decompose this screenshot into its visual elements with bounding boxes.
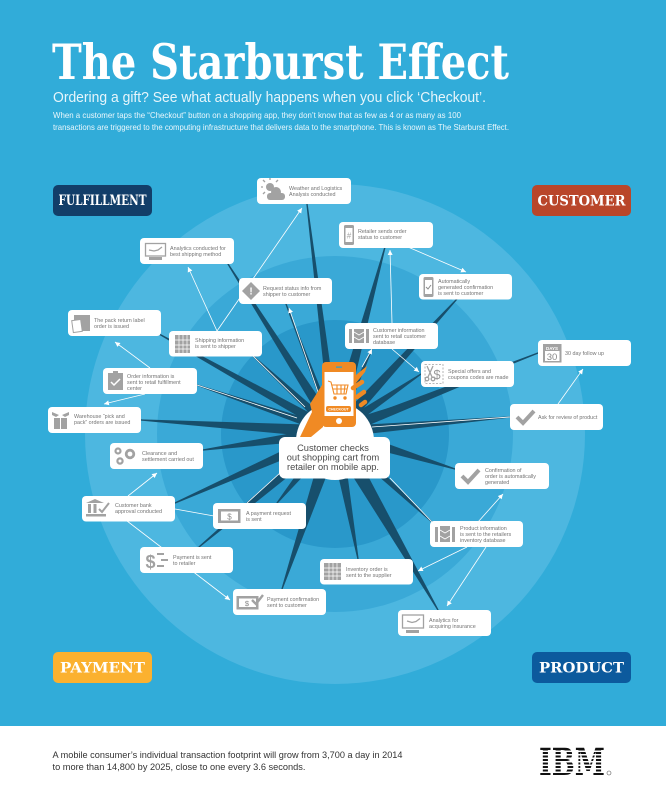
- IBM logo: IBM: [539, 740, 605, 784]
- card: payment sent to retailer: $: [145, 552, 156, 572]
- category tag: fulfillment: FULFILLMENT: [58, 193, 146, 209]
- title: The Starburst Effect: [52, 33, 509, 91]
- footer band: [0, 726, 666, 800]
- card: request status: shipper to customer: [263, 292, 311, 298]
- card: pack return label: [68, 310, 161, 336]
- icon: phone in hand: CHECKOUT: [328, 408, 349, 412]
- card: product information: [430, 521, 523, 547]
- card: customer information database: sent to retail customer: [373, 334, 426, 340]
- intro text: transactions are triggered to the computing infrastructure that delivers data to the smartphone. This is known as The Starburst Effect.: [53, 122, 509, 132]
- card: 30 day follow up: 30 day follow up: [565, 351, 604, 357]
- concentric rings: [85, 184, 585, 684]
- card: product information: Product information: [460, 526, 507, 532]
- card: analytics for insurance: Analytics for: [429, 618, 459, 624]
- card: confirmation of order: generated: [485, 480, 509, 486]
- card: ask for review: Ask for review of product: [538, 415, 598, 421]
- card: customer bank approval: [82, 496, 175, 522]
- card: payment request: [213, 503, 306, 529]
- card: automatically generated confirmation: generated confirmation: [438, 285, 493, 291]
- card: request status: [239, 278, 332, 304]
- card: pack return label: order is issued: [94, 324, 129, 330]
- card: payment request: is sent: [246, 517, 262, 523]
- card: clearance and settlement: settlement carried out: [142, 457, 194, 463]
- card: customer information database: database: [373, 340, 395, 346]
- subtitle: Ordering a gift? See what actually happens when you click ‘Checkout’.: [53, 90, 486, 106]
- card: 30 day follow up: DAYS: [546, 346, 558, 351]
- card: special offers and coupon codes: $: [433, 367, 441, 382]
- category tag: customer: CUSTOMER: [538, 194, 626, 210]
- intro text: When a customer taps the “Checkout” button on a shopping app, they don’t know that as few as 4 or as many as 100: [53, 110, 461, 120]
- card: special offers and coupon codes: Special offers and: [448, 369, 491, 375]
- card: payment sent to retailer: [140, 547, 233, 573]
- card: analytics for shipping: best shipping method: [170, 252, 221, 258]
- card: analytics for shipping: Analytics conducted for: [170, 246, 226, 252]
- center card: customer checks out: [279, 437, 390, 478]
- card: automatically generated confirmation: Automatically: [438, 279, 470, 285]
- card: confirmation of order: [455, 463, 549, 489]
- card: confirmation of order: order is automatically: [485, 474, 536, 480]
- intro text: [53, 110, 509, 132]
- card: weather and logistics: Analysis conducted: [289, 192, 335, 198]
- card: special offers and coupon codes: [421, 361, 514, 387]
- card: customer bank approval: approval conducted: [115, 509, 162, 515]
- card: confirmation of order: Confirmation of: [485, 468, 522, 474]
- card: retailer sends order status: #: [347, 232, 352, 240]
- card: customer information database: Customer information: [373, 328, 425, 334]
- category tag: product: [532, 652, 631, 683]
- card: retailer sends order status: status to customer: [358, 235, 402, 241]
- card: shipping information: Shipping information: [195, 338, 244, 344]
- card: retailer sends order status: Retailer sends order: [358, 229, 407, 235]
- card: pack return label: The pack return label: [94, 318, 145, 324]
- card: request status: !: [249, 286, 253, 298]
- card: payment confirmation: Payment confirmation: [267, 597, 319, 603]
- card: order information: sent to retail fulfillment: [127, 380, 181, 386]
- card: automatically generated confirmation: [419, 274, 512, 300]
- card: weather and logistics: [257, 178, 351, 204]
- white connector arrows: [104, 208, 583, 606]
- card: 30 day follow up: 30: [547, 352, 557, 363]
- card: inventory order: Inventory order is: [346, 567, 388, 573]
- card: special offers and coupon codes: coupons codes are made: [448, 375, 509, 381]
- card: clearance and settlement: [110, 443, 203, 469]
- footer text: to more than 14,800 by 2025, close to one every 3.6 seconds.: [52, 762, 306, 772]
- center card: customer checks out: retailer on mobile app.: [287, 462, 379, 472]
- white hub circle: [296, 402, 374, 480]
- card: analytics for insurance: acquiring insurance: [429, 624, 476, 630]
- card: shipping information: [169, 331, 262, 356]
- category tag: payment: [53, 652, 152, 683]
- card: product information: inventory database: [460, 538, 506, 544]
- card: analytics for shipping: [140, 238, 234, 264]
- center card: customer checks out: Customer checks: [297, 443, 369, 453]
- card: customer information database: [345, 323, 438, 349]
- card: warehouse pick and pack: pack” orders are issued: [74, 420, 130, 426]
- card: payment sent to retailer: Payment is sent: [173, 555, 212, 561]
- card: warehouse pick and pack: [48, 407, 141, 433]
- footer text: [52, 750, 402, 772]
- card: inventory order: [320, 559, 413, 584]
- card: payment confirmation: $: [245, 599, 250, 608]
- category tag: payment: PAYMENT: [60, 660, 145, 676]
- card: product information: is sent to the retailers: [460, 532, 512, 538]
- card: shipping information: is sent to shipper: [195, 344, 236, 350]
- card: retailer sends order status: [339, 222, 433, 248]
- footer text: A mobile consumer’s individual transaction footprint will grow from 3,700 a day in 2014: [52, 750, 402, 760]
- card: ask for review: [510, 404, 603, 430]
- card: inventory order: sent to the supplier: [346, 573, 392, 579]
- card: payment confirmation: [233, 589, 326, 615]
- icon: phone in hand: [300, 362, 367, 437]
- card: weather and logistics: Weather and Logistics: [289, 186, 343, 192]
- card: payment request: $: [227, 512, 232, 522]
- category tag: product: PRODUCT: [539, 660, 624, 676]
- card: payment request: A payment request: [246, 511, 291, 517]
- card: request status: Request status info from: [263, 286, 322, 292]
- center card: customer checks out: out shopping cart from: [287, 452, 379, 462]
- card: order information: [103, 368, 197, 394]
- card: payment confirmation: sent to customer: [267, 603, 307, 609]
- card: analytics for insurance: [398, 610, 491, 636]
- card: order information: Order information is: [127, 374, 175, 380]
- category tag: customer: [532, 185, 631, 216]
- card: clearance and settlement: Clearance and: [142, 451, 177, 457]
- card: customer bank approval: Customer bank: [115, 503, 152, 509]
- card: 30 day follow up: [538, 340, 631, 366]
- card: warehouse pick and pack: Warehouse “pick and: [74, 414, 125, 420]
- starburst rays: [141, 204, 538, 610]
- category tag: fulfillment: [53, 185, 152, 216]
- card: order information: center: [127, 386, 142, 392]
- card: payment sent to retailer: to retailer: [173, 561, 196, 567]
- card: automatically generated confirmation: is sent to customer: [438, 291, 483, 297]
